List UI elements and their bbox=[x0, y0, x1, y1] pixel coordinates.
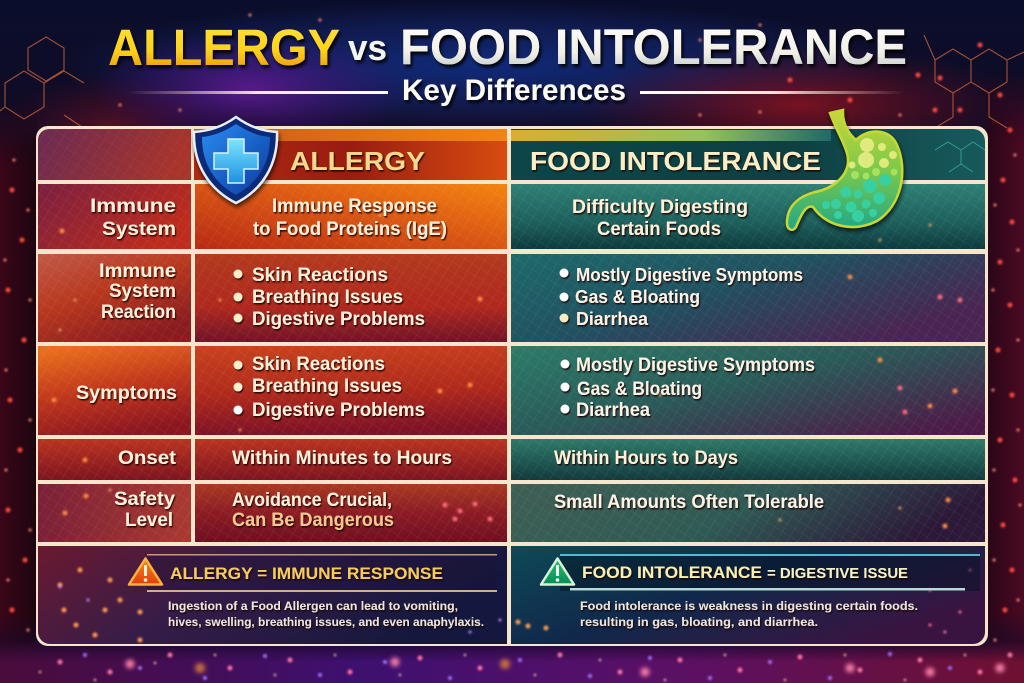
allergy value bbox=[253, 196, 447, 240]
row label: Safety bbox=[114, 489, 175, 510]
intolerance bullet list bbox=[560, 355, 815, 421]
intolerance value: Difficulty Digesting bbox=[572, 197, 748, 218]
allergy bullet list: Digestive Problems bbox=[252, 400, 425, 421]
allergy value: Immune Response bbox=[272, 196, 437, 217]
allergy bullet list bbox=[234, 354, 425, 421]
callout body: resulting in gas, bloating, and diarrhea. bbox=[580, 616, 818, 629]
intolerance bullet list: Mostly Digestive Symptoms bbox=[576, 355, 815, 376]
callout body: hives, swelling, breathing issues, and even anaphylaxis. bbox=[168, 616, 484, 629]
row: Immune System bbox=[38, 184, 985, 249]
callout: allergy summary bbox=[38, 546, 507, 644]
allergy value: Within Minutes to Hours bbox=[232, 448, 452, 469]
allergy bullet list: Skin Reactions bbox=[252, 354, 385, 375]
title words: FOOD INTOLERANCE: FOOD INTOLERANCE bbox=[400, 19, 907, 75]
row label bbox=[114, 489, 175, 531]
intolerance bullet list: Diarrhea bbox=[576, 400, 650, 421]
allergy bullet list bbox=[234, 265, 425, 330]
icon: warning triangle bbox=[129, 558, 162, 584]
callout heading bbox=[582, 563, 908, 582]
title word: ALLERGY: ALLERGY bbox=[108, 19, 340, 76]
row: Symptoms bbox=[38, 346, 985, 435]
header row bbox=[38, 129, 985, 180]
row label: System bbox=[102, 219, 176, 240]
intolerance bullet list: Mostly Digestive Symptoms bbox=[576, 265, 803, 285]
title word: vs: vs bbox=[348, 27, 387, 68]
column heading: ALLERGY: ALLERGY bbox=[290, 146, 425, 176]
row label: System bbox=[109, 281, 176, 302]
intolerance bullet list: Diarrhea bbox=[576, 309, 649, 329]
intolerance bullet list: Gas & Bloating bbox=[577, 379, 702, 400]
allergy value bbox=[232, 490, 394, 531]
callout body: Food intolerance is weakness in digesting certain foods. bbox=[580, 600, 918, 613]
icon: green warning triangle bbox=[541, 558, 574, 584]
intolerance value: Small Amounts Often Tolerable bbox=[554, 492, 824, 513]
row label: Onset bbox=[118, 448, 177, 469]
subtitle with flanking lines bbox=[128, 74, 905, 107]
title bbox=[108, 19, 907, 76]
allergy bullet list: Digestive Problems bbox=[252, 309, 425, 330]
comparison table panel bbox=[36, 126, 988, 646]
row: Immune System Reaction bbox=[38, 254, 985, 342]
intolerance value: Certain Foods bbox=[597, 219, 721, 240]
allergy bullet list: Breathing Issues bbox=[252, 376, 402, 397]
callout: food intolerance summary bbox=[511, 546, 985, 644]
allergy bullet list: Skin Reactions bbox=[252, 265, 388, 286]
row: Safety Level bbox=[38, 484, 985, 542]
row label: Immune bbox=[99, 261, 176, 282]
row label bbox=[99, 261, 176, 323]
row: Onset bbox=[38, 439, 985, 480]
callout heading: = DIGESTIVE ISSUE bbox=[767, 565, 908, 582]
row label: Level bbox=[125, 510, 173, 531]
subtitle with flanking lines: Key Differences bbox=[402, 74, 626, 107]
callout body: Ingestion of a Food Allergen can lead to vomiting, bbox=[168, 600, 458, 613]
callout heading: ALLERGY = IMMUNE RESPONSE bbox=[170, 564, 443, 583]
allergy value: Can Be Dangerous bbox=[232, 510, 394, 531]
icon: blue medical shield bbox=[194, 117, 277, 203]
intolerance bullet list: Gas & Bloating bbox=[575, 287, 700, 307]
intolerance bullet list bbox=[560, 265, 803, 329]
row label: Symptoms bbox=[76, 383, 177, 404]
allergy value: to Food Proteins (IgE) bbox=[253, 219, 447, 240]
callout body bbox=[580, 600, 918, 629]
allergy value: Avoidance Crucial, bbox=[232, 490, 392, 511]
callout heading: FOOD INTOLERANCE bbox=[582, 563, 762, 582]
row label: Reaction bbox=[101, 302, 176, 323]
icon: green stomach bbox=[787, 110, 902, 230]
column heading: FOOD INTOLERANCE: FOOD INTOLERANCE bbox=[530, 146, 821, 176]
intolerance value bbox=[572, 197, 748, 240]
callout body bbox=[168, 600, 484, 629]
allergy bullet list: Breathing Issues bbox=[252, 287, 403, 308]
row label bbox=[90, 196, 176, 240]
row label: Immune bbox=[90, 196, 176, 217]
intolerance value: Within Hours to Days bbox=[554, 448, 738, 469]
